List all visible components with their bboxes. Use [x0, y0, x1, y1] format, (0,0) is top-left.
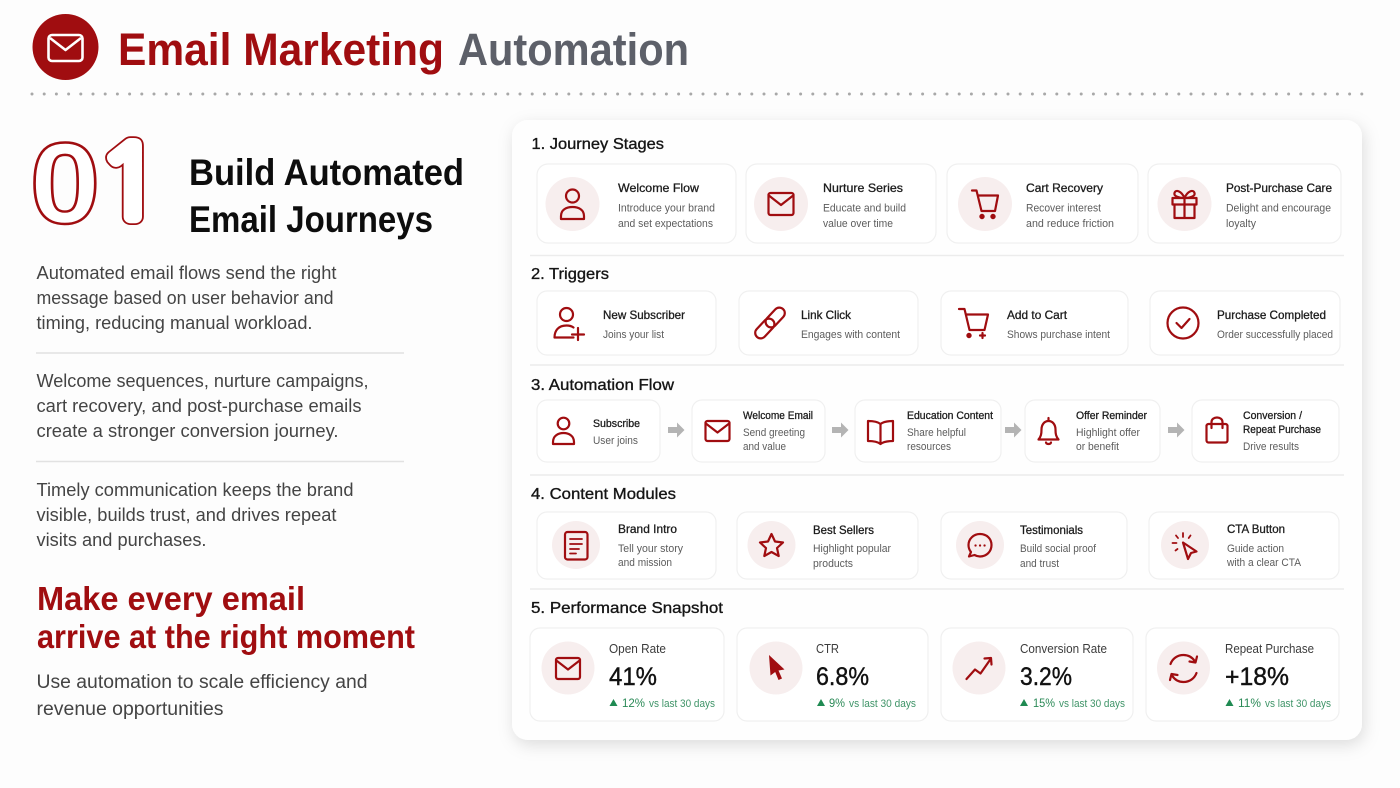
icon: person [553, 418, 574, 444]
icon: envelope [706, 421, 730, 441]
text block: automated flows: timing, reducing manual workload. [36, 312, 312, 333]
card: cart recovery: Recover interest [1026, 202, 1101, 214]
arrow [832, 422, 848, 438]
icon: cursor [769, 655, 784, 680]
metric card: conversion rate [941, 628, 1133, 721]
card: testimonials: and trust [1020, 558, 1059, 570]
flow step: offer reminder: or benefit [1076, 441, 1119, 453]
section number 01 [30, 120, 162, 248]
section number 01: 1 [98, 132, 162, 232]
icon: envelope [768, 193, 794, 215]
card: link click [739, 291, 918, 355]
text block: use automation: Use automation to scale efficiency and [36, 672, 368, 693]
callout: make every email arrive: arrive at the right moment [37, 618, 415, 655]
metric card: repeat purchase: Repeat Purchase [1225, 642, 1314, 656]
heading: build automated email journeys: Build Automated [189, 152, 464, 193]
icon: click cursor [1172, 533, 1196, 559]
flow step: welcome email: and value [743, 441, 786, 453]
card: nurture series [746, 164, 936, 243]
card: purchase completed [1150, 291, 1340, 355]
heading: performance snapshot: 5. Performance Snapshot [531, 600, 724, 617]
card: best sellers: products [813, 558, 853, 570]
section number 01: 0 [30, 120, 100, 248]
flow step: education content [855, 400, 1001, 462]
icon: bell [1038, 418, 1058, 444]
callout: make every email arrive: Make every email [37, 580, 305, 617]
card: welcome flow: Welcome Flow [618, 181, 699, 195]
card: cta button [1149, 512, 1339, 579]
icon: envelope [556, 658, 580, 679]
card: add to cart: Shows purchase intent [1007, 329, 1110, 341]
metric card: ctr [737, 628, 928, 721]
card: cart recovery: Cart Recovery [1026, 181, 1103, 195]
icon: open book [868, 421, 893, 444]
card: new subscriber: New Subscriber [603, 308, 685, 322]
flow step: education content: resources [907, 441, 951, 453]
metric card: open rate [530, 628, 724, 721]
icon: person plus [554, 308, 584, 340]
heading: automation flow: 3. Automation Flow [531, 377, 674, 394]
card: best sellers [737, 512, 918, 579]
flow step: conversion / repeat purchase [1192, 400, 1339, 462]
card: post-purchase care: Delight and encourage [1226, 202, 1331, 214]
text block: timely communication: visits and purchases. [36, 529, 206, 550]
callout: make every email arrive [37, 580, 415, 655]
text block: sequences [36, 370, 368, 441]
text block: timely communication: visible, builds trust, and drives repeat [36, 504, 336, 525]
metric card: ctr: CTR [816, 642, 839, 656]
card: add to cart [941, 291, 1128, 355]
card: new subscriber [537, 291, 716, 355]
card: link click: Engages with content [801, 329, 900, 341]
flow step: welcome email: Welcome Email [743, 410, 813, 422]
text block: timely communication: Timely communication keeps the brand [36, 479, 354, 500]
metric card: ctr: 9% [829, 696, 845, 710]
metric card: repeat purchase [1146, 628, 1339, 721]
card: brand intro: and mission [618, 557, 672, 569]
card: cta button: Guide action [1227, 543, 1284, 555]
card: nurture series: Educate and build [823, 202, 906, 214]
flow step: conversion / repeat purchase: Drive results [1243, 441, 1299, 453]
card: brand intro: Tell your story [618, 543, 683, 555]
card: add to cart: Add to Cart [1007, 308, 1068, 322]
icon: refresh arrows [1170, 655, 1197, 682]
card: best sellers: Highlight popular [813, 543, 891, 555]
card: nurture series: Nurture Series [823, 181, 903, 195]
text block: sequences: cart recovery, and post-purchase emails [36, 395, 362, 416]
metric card: open rate: 12% [622, 696, 645, 710]
icon: shopping bag [1206, 418, 1228, 442]
flow step: subscribe: User joins [593, 435, 638, 447]
heading: content modules: 4. Content Modules [531, 486, 676, 503]
flow step: welcome email: Send greeting [743, 427, 805, 439]
card: new subscriber: Joins your list [603, 329, 664, 341]
card: welcome flow [537, 164, 736, 243]
card: welcome flow: Introduce your brand [618, 202, 715, 214]
text block: automated flows: Automated email flows send the right [36, 262, 336, 283]
metric card: ctr: 6.8% [816, 663, 869, 691]
flow step: subscribe [537, 400, 660, 462]
flow step: welcome email [692, 400, 825, 462]
heading: journey stages: 1. Journey Stages [532, 136, 664, 153]
metric card: conversion rate: vs last 30 days [1059, 698, 1125, 710]
metric card: conversion rate: 3.2% [1020, 663, 1072, 691]
card: testimonials [941, 512, 1127, 579]
text block: timely communication [36, 479, 354, 550]
text block: use automation: revenue opportunities [36, 699, 224, 720]
icon: star [760, 534, 783, 556]
metric card: open rate: vs last 30 days [649, 698, 715, 710]
metric card: conversion rate: Conversion Rate [1020, 642, 1107, 656]
text block: use automation [36, 672, 368, 720]
icon: check circle [1168, 308, 1198, 338]
flow step: offer reminder: Offer Reminder [1076, 410, 1147, 422]
metric card: repeat purchase: +18% [1225, 663, 1289, 691]
card: nurture series: value over time [823, 218, 893, 230]
card: purchase completed: Purchase Completed [1217, 308, 1326, 322]
card: post-purchase care [1148, 164, 1341, 243]
flow step: education content: Share helpful [907, 427, 966, 439]
heading: build automated email journeys: Email Journeys [189, 199, 433, 240]
card: cta button: with a clear CTA [1226, 557, 1302, 569]
card: post-purchase care: loyalty [1226, 218, 1256, 230]
flow step: conversion / repeat purchase: Repeat Purchase [1243, 424, 1321, 436]
text block: sequences: create a stronger conversion journey. [36, 420, 338, 441]
metric card: conversion rate: 15% [1033, 696, 1055, 710]
arrow [1005, 422, 1022, 438]
icon: gift [1172, 191, 1196, 218]
section number 01: 1 [98, 132, 162, 232]
metric card: open rate: Open Rate [609, 642, 666, 656]
card: cart recovery [947, 164, 1138, 243]
card: best sellers: Best Sellers [813, 523, 874, 537]
icon: header email badge [32, 14, 98, 80]
text block: automated flows: message based on user behavior and [36, 287, 334, 308]
heading: triggers: 2. Triggers [531, 266, 609, 283]
icon: link [753, 305, 787, 341]
metric card: ctr: vs last 30 days [849, 698, 916, 710]
card: testimonials: Build social proof [1020, 543, 1097, 555]
card: testimonials: Testimonials [1020, 523, 1083, 537]
arrow [668, 422, 684, 438]
arrow [1168, 422, 1184, 438]
icon: cart plus [959, 309, 988, 338]
metric card: repeat purchase: vs last 30 days [1265, 698, 1331, 710]
icon: person [561, 190, 584, 219]
card: post-purchase care: Post-Purchase Care [1226, 181, 1332, 195]
heading: build automated email journeys [189, 152, 464, 240]
card: brand intro [537, 512, 716, 579]
flow step: offer reminder: Highlight offer [1076, 427, 1140, 439]
icon: trend line [966, 658, 992, 679]
flow step: conversion / repeat purchase: Conversion / [1243, 410, 1303, 422]
flow step: offer reminder [1025, 400, 1160, 462]
flow step: education content: Education Content [907, 410, 993, 422]
card: brand intro: Brand Intro [618, 522, 677, 536]
card: cart recovery: and reduce friction [1026, 218, 1114, 230]
title: Automation [458, 24, 689, 75]
icon: speech bubble [968, 534, 992, 556]
title: Email Marketing [118, 24, 444, 75]
card: cta button: CTA Button [1227, 522, 1285, 536]
metric card: open rate: 41% [609, 663, 657, 691]
flow step: subscribe: Subscribe [593, 418, 640, 430]
text block: sequences: Welcome sequences, nurture campaigns, [36, 370, 368, 391]
card: welcome flow: and set expectations [618, 218, 713, 230]
card: purchase completed: Order successfully placed [1217, 329, 1333, 341]
title [118, 24, 689, 75]
metric card: repeat purchase: 11% [1238, 696, 1261, 710]
icon: cart [972, 190, 998, 218]
text block: automated flows [36, 262, 336, 333]
card: link click: Link Click [801, 308, 852, 322]
panel: email journey dashboard [512, 120, 1362, 740]
icon: document [565, 532, 588, 560]
